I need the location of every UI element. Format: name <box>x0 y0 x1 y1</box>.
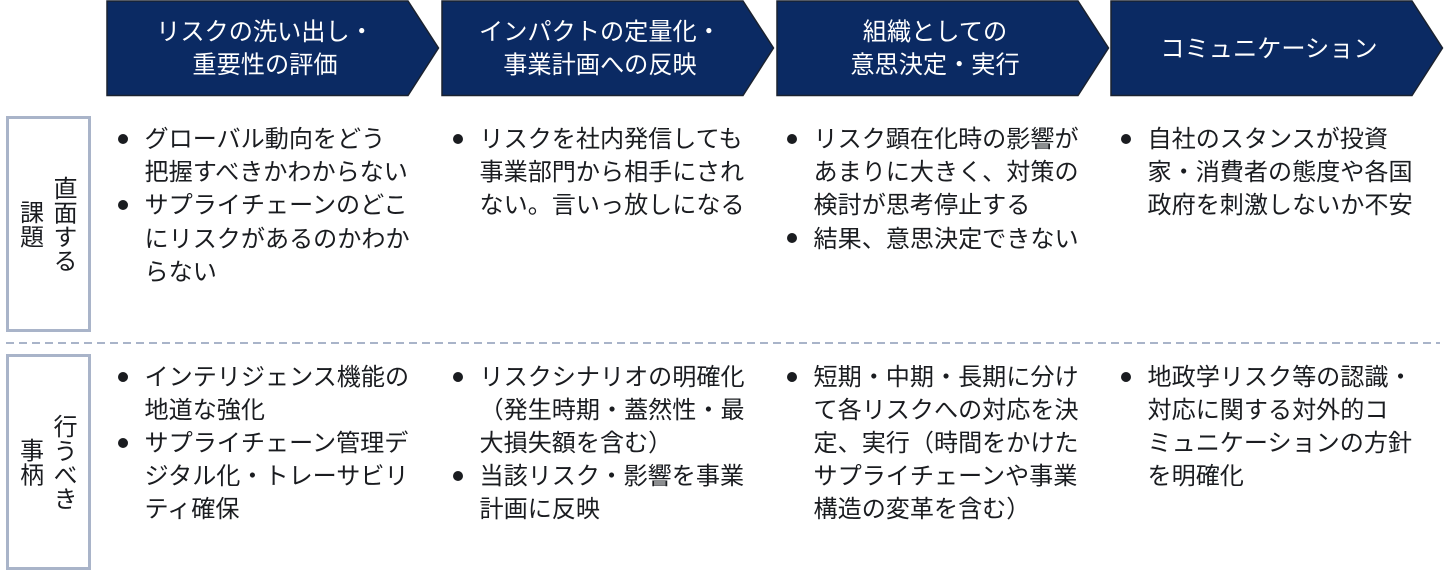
challenge text: column 2: 事業部門から相手にされ <box>480 159 744 186</box>
row label: 行うべき事柄 <box>6 354 91 570</box>
header chevron: コミュニケーション: コミュニケーション <box>1160 36 1378 62</box>
challenge text: column 3 <box>787 126 1079 253</box>
challenge text: column 4 <box>1121 126 1413 219</box>
header chevron: リスクの洗い出し・重要性の評価 <box>106 0 440 96</box>
header chevron: 組織としての意思決定・実行 <box>776 0 1110 96</box>
action text: column 2: リスクシナリオの明確化 <box>480 364 745 390</box>
action text: column 2: （発生時期・蓋然性・最 <box>480 397 745 424</box>
row label: 直面する課題: 直面する <box>49 176 76 272</box>
action text: column 2: 計画に反映 <box>480 496 600 523</box>
action text: column 1: 地道な強化 <box>144 397 265 424</box>
action text: column 4: 対応に関する対外的コ <box>1148 397 1388 424</box>
action text: column 1 <box>118 364 409 523</box>
action text: column 3: 構造の変革を含む） <box>814 496 1030 523</box>
action text: column 3 <box>787 364 1079 523</box>
challenge text: column 4: 家・消費者の態度や各国 <box>1148 159 1413 186</box>
action text: column 4: 地政学リスク等の認識・ <box>1148 364 1413 390</box>
action text: column 2 <box>453 364 745 523</box>
action text: column 3: 定、実行（時間をかけた <box>814 430 1079 457</box>
challenge text: column 3: あまりに大きく、対策の <box>814 159 1079 186</box>
action text: column 3: 短期・中期・長期に分け <box>814 364 1079 390</box>
challenge text: column 2: リスクを社内発信しても <box>480 126 743 153</box>
challenge text: column 1: にリスクがあるのかわか <box>144 226 410 253</box>
challenge text: column 4: 政府を刺激しないか不安 <box>1148 192 1413 219</box>
action text: column 2: 大損失額を含む） <box>480 430 672 457</box>
action text: column 3: て各リスクへの対応を決 <box>814 397 1079 424</box>
header chevron: コミュニケーション <box>1110 0 1444 96</box>
header chevron: 組織としての意思決定・実行: 組織としての <box>863 19 1007 46</box>
header chevron: リスクの洗い出し・重要性の評価: リスクの洗い出し・ <box>156 19 374 46</box>
challenge text: column 2 <box>453 126 745 219</box>
challenge text: column 3: 結果、意思決定できない <box>814 226 1079 253</box>
action text: column 4 <box>1121 364 1413 490</box>
action text: column 1: インテリジェンス機能の <box>144 364 409 390</box>
header chevron: 組織としての意思決定・実行: 意思決定・実行 <box>850 52 1020 79</box>
challenge text: column 3: リスク顕在化時の影響が <box>814 126 1079 153</box>
challenge text: column 1 <box>118 126 410 286</box>
challenge text: column 2: ない。言いっ放しになる <box>480 192 745 219</box>
action text: column 1: サプライチェーン管理デ <box>144 430 408 457</box>
row label: 直面する課題 <box>6 116 91 332</box>
challenge text: column 1: サプライチェーンのどこ <box>144 192 408 219</box>
action text: column 3: サプライチェーンや事業 <box>814 463 1077 490</box>
row label: 直面する課題: 課題 <box>16 200 42 248</box>
row label: 行うべき事柄: 事柄 <box>16 438 42 486</box>
header chevron: インパクトの定量化・事業計画への反映 <box>441 0 774 96</box>
challenge text: column 4: 自社のスタンスが投資 <box>1148 126 1388 153</box>
challenge text: column 3: 検討が思考停止する <box>814 192 1030 219</box>
header chevron: インパクトの定量化・事業計画への反映: インパクトの定量化・ <box>479 19 721 46</box>
row label: 行うべき事柄: 行うべき <box>49 414 76 510</box>
action text: column 1: ジタル化・トレーサビリ <box>144 463 409 490</box>
action text: column 4: を明確化 <box>1148 463 1244 490</box>
action text: column 1: ティ確保 <box>144 496 239 523</box>
challenge text: column 1: らない <box>144 259 217 286</box>
challenge text: column 1: グローバル動向をどう <box>144 126 385 153</box>
header chevron: リスクの洗い出し・重要性の評価: 重要性の評価 <box>192 52 338 79</box>
header chevron: インパクトの定量化・事業計画への反映: 事業計画への反映 <box>503 52 697 79</box>
challenge text: column 1: 把握すべきかわからない <box>144 159 408 186</box>
action text: column 2: 当該リスク・影響を事業 <box>480 463 744 490</box>
action text: column 4: ミュニケーションの方針 <box>1148 430 1412 457</box>
